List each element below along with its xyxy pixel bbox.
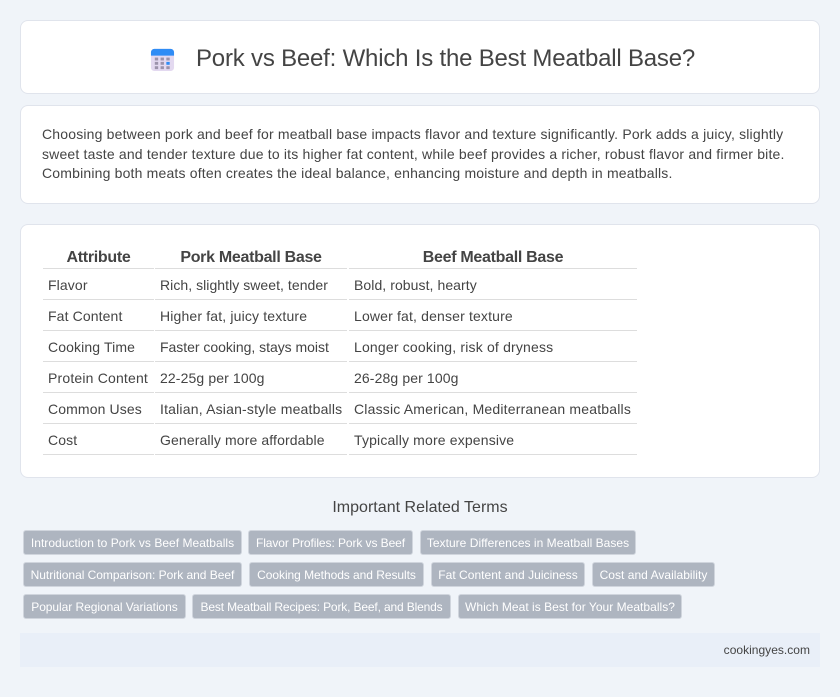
row: protein content: Protein Content: [48, 370, 148, 386]
row lines: [43, 268, 637, 455]
row: protein content: [48, 370, 459, 386]
table header: Attribute: [67, 249, 130, 266]
intro text: sweet taste and tender texture due to its higher fat content, while beef provides a richer, robust flavor and firmer bite.: [42, 146, 785, 162]
row: flavor: [48, 277, 477, 293]
footer source: cookingyes.com: [724, 643, 810, 657]
tag list: Popular Regional Variations: [31, 600, 178, 614]
row: cost: Typically more expensive: [354, 432, 514, 448]
intro text: Choosing between pork and beef for meatball base impacts flavor and texture significantly. Pork adds a juicy, slightly: [42, 126, 783, 142]
icon: calendar: [150, 48, 174, 71]
panel: comparison table: [20, 224, 820, 478]
tag list: [23, 530, 715, 619]
tag list: Which Meat is Best for Your Meatballs?: [465, 600, 675, 614]
row: flavor: Flavor: [48, 277, 88, 293]
row: common uses: Common Uses: [48, 401, 142, 417]
tag list: Cooking Methods and Results: [257, 568, 416, 582]
row: protein content: 26-28g per 100g: [354, 370, 459, 386]
row: cooking time: Longer cooking, risk of dryness: [354, 339, 553, 355]
row: flavor: Rich, slightly sweet, tender: [160, 277, 328, 293]
panel: introduction: [20, 105, 820, 204]
tag list: Flavor Profiles: Pork vs Beef: [256, 536, 405, 550]
row: fat content: [48, 308, 513, 324]
table header: Beef Meatball Base: [423, 249, 563, 266]
tag list: Cost and Availability: [600, 568, 707, 582]
intro text: [42, 126, 785, 181]
heading: related terms: Important Related Terms: [332, 499, 508, 516]
tag list: Best Meatball Recipes: Pork, Beef, and Blends: [200, 600, 443, 614]
title: Pork vs Beef: Which Is the Best Meatball Base?: [196, 45, 695, 72]
row: cost: Cost: [48, 432, 77, 448]
table header: Pork Meatball Base: [180, 249, 322, 266]
tag list: Introduction to Pork vs Beef Meatballs: [31, 536, 234, 550]
row: common uses: Classic American, Mediterranean meatballs: [354, 401, 631, 417]
row: cooking time: [48, 339, 553, 355]
tag list: Fat Content and Juiciness: [438, 568, 578, 582]
row: flavor: Bold, robust, hearty: [354, 277, 477, 293]
row: cooking time: Faster cooking, stays moist: [160, 339, 329, 355]
tag list: Texture Differences in Meatball Bases: [427, 536, 629, 550]
row: fat content: Higher fat, juicy texture: [160, 308, 307, 324]
panel: title header: [20, 20, 820, 94]
row: cost: [48, 432, 514, 448]
row: protein content: 22-25g per 100g: [160, 370, 265, 386]
row: cost: Generally more affordable: [160, 432, 325, 448]
row: common uses: [48, 401, 631, 417]
footer: [20, 633, 820, 667]
row: cooking time: Cooking Time: [48, 339, 135, 355]
row: common uses: Italian, Asian-style meatballs: [160, 401, 342, 417]
row: fat content: Lower fat, denser texture: [354, 308, 513, 324]
tag list: Nutritional Comparison: Pork and Beef: [31, 568, 234, 582]
row: fat content: Fat Content: [48, 308, 122, 324]
intro text: Combining both meats often creates the ideal balance, enhancing moisture and depth in meatballs.: [42, 165, 673, 181]
table header: [66, 249, 563, 266]
